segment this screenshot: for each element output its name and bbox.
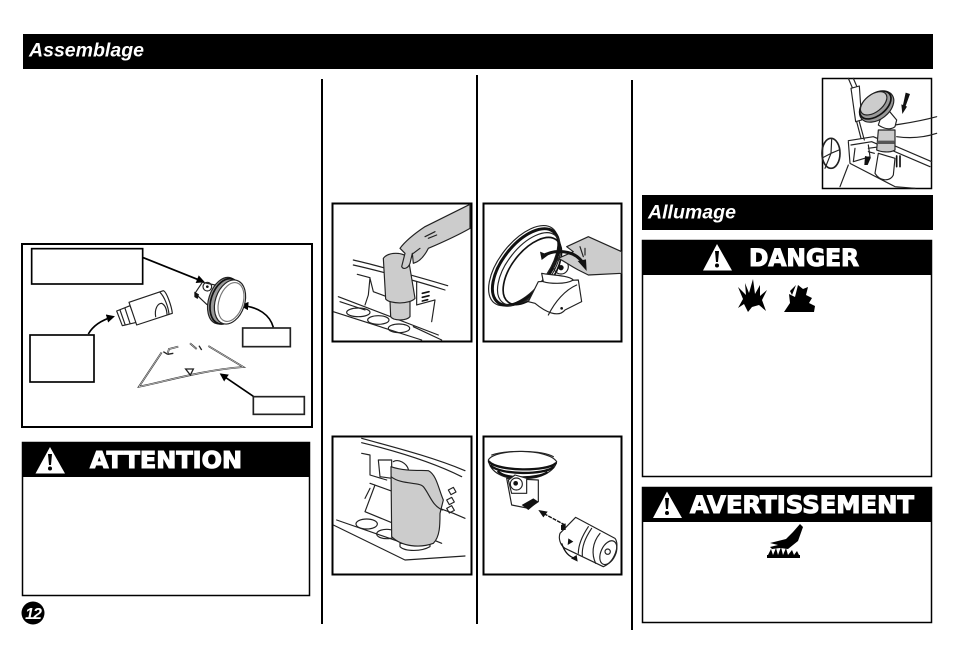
arrow down	[901, 93, 910, 114]
burner	[854, 85, 900, 129]
panel: screwing cylinder onto burner	[484, 436, 622, 574]
section heading: Assemblage: Assemblage	[28, 40, 144, 62]
icon: warning triangle	[653, 492, 682, 518]
section heading: Allumage: Allumage	[647, 202, 736, 224]
hand	[400, 204, 470, 268]
panel: attaching burner to cylinder	[475, 204, 622, 342]
icon: warning triangle	[36, 447, 65, 474]
cylinder	[559, 517, 617, 567]
panel: danger warning	[642, 240, 932, 476]
hand	[558, 237, 622, 275]
stove body	[840, 137, 932, 188]
icon: warning triangle	[703, 244, 732, 270]
cylinder	[875, 153, 895, 180]
illustration: gas cylinder	[117, 291, 172, 326]
rotation arrow	[542, 252, 583, 263]
heading: danger: DANGER	[749, 244, 859, 272]
heading: attention: ATTENTION	[90, 448, 242, 474]
label box: wire stand part	[253, 397, 304, 414]
panel: cylinder covered by bag	[332, 436, 472, 574]
panel: attached lantern on stove	[822, 78, 937, 188]
label box: reflector part	[243, 328, 290, 347]
icon: explosion	[738, 279, 767, 312]
panel: parts diagram	[22, 244, 312, 427]
section heading: Assemblage	[23, 34, 933, 69]
arrow: to cylinder	[88, 317, 113, 334]
burner base	[528, 280, 582, 314]
label box: cylinder part	[30, 335, 94, 382]
panel: hand inserting cylinder	[332, 204, 472, 342]
arrow: to wire stand	[221, 374, 253, 396]
section heading: Allumage	[642, 195, 933, 230]
arrow: to burner	[143, 258, 203, 282]
illustration: wire stand	[139, 343, 243, 387]
page number badge: 12	[25, 606, 42, 623]
icon: hot surface hand	[767, 524, 803, 558]
label box: burner part	[32, 249, 143, 284]
arrow: to reflector	[242, 306, 273, 327]
cylinder	[390, 301, 410, 320]
panel: avertissement warning	[642, 487, 932, 622]
arrow	[543, 513, 565, 525]
page number badge	[22, 602, 44, 624]
icon: flame	[784, 285, 815, 312]
column divider lines	[322, 75, 632, 630]
burner	[507, 478, 538, 508]
illustration: burner head	[194, 273, 251, 328]
panel: attention warning	[22, 442, 310, 596]
bag	[391, 467, 443, 546]
heading: avertissement: AVERTISSEMENT	[690, 491, 915, 519]
